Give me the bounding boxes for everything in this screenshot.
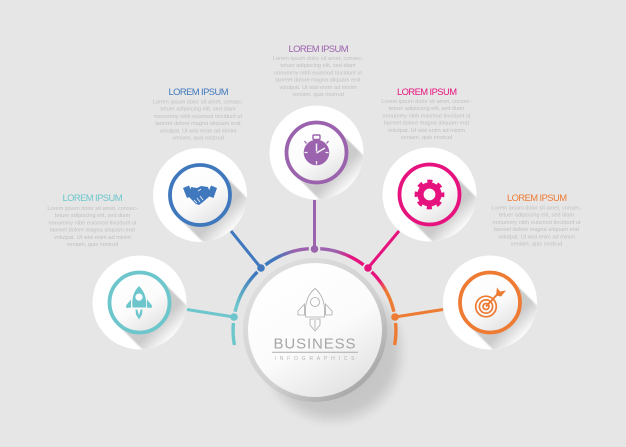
- text block: purple: Lorem ipsum dolor sit amet, consec-: [273, 56, 363, 62]
- text block: blue: laoreet dolore magna aliquam erat: [155, 121, 241, 127]
- hub title: [272, 336, 358, 362]
- text block: orange: [491, 192, 582, 248]
- text block: teal: Lorem ipsum dolor sit amet, consec-: [47, 206, 138, 212]
- text block: pink: tetuer adipiscing elit, sed diam: [389, 106, 464, 112]
- center hub: [243, 258, 387, 402]
- text block: purple: volutpat. Ut wisi enim ad minim: [279, 85, 357, 91]
- panel: blue circle: [153, 148, 247, 242]
- text block: purple: veniam, quis nostrud: [292, 92, 344, 98]
- icon: handshake: [183, 186, 217, 205]
- text block: pink: Lorem ipsum dolor sit amet, consec-: [381, 99, 472, 105]
- text block: pink: volutpat. Ut wisi enim ad minim: [388, 128, 465, 134]
- hub logo: rocket outline: [298, 288, 332, 331]
- panel: purple circle: [270, 106, 364, 200]
- spoke: teal: [187, 310, 238, 321]
- icon: target with arrow: [476, 288, 506, 317]
- text block: blue: Lorem ipsum dolor sit amet, consec-: [153, 100, 243, 106]
- icon: rocket: [126, 286, 152, 320]
- text block: blue: [153, 86, 243, 142]
- text block: pink: LOREM IPSUM: [397, 86, 457, 97]
- icon: stopwatch: [304, 135, 329, 165]
- spoke: orange: [391, 310, 443, 321]
- panel: pink circle: [382, 148, 476, 242]
- spoke: pink: [364, 231, 399, 272]
- spoke: blue: [231, 231, 265, 272]
- panel: teal circle: [92, 256, 186, 350]
- text block: teal: laoreet dolore magna aliquam erat: [50, 228, 136, 234]
- text block: orange: Lorem ipsum dolor sit amet, consec-: [491, 206, 582, 212]
- text block: purple: [273, 43, 363, 98]
- text block: purple: LOREM IPSUM: [288, 43, 349, 54]
- text block: blue: tetuer adipiscing elit, sed diam: [160, 107, 236, 113]
- text block: orange: volutpat. Ut wisi enim ad minim: [498, 234, 575, 240]
- arc connector: [233, 249, 396, 345]
- text block: blue: LOREM IPSUM: [168, 86, 229, 97]
- text block: orange: nonummy nibh euismod tincidunt ut: [492, 220, 581, 226]
- text block: teal: nonummy nibh euismod tincidunt ut: [48, 220, 137, 226]
- hub title: INFOGRAPHICS: [274, 356, 355, 362]
- text block: blue: veniam, quis nostrud: [172, 136, 224, 142]
- spoke: purple: [311, 200, 318, 253]
- text block: orange: laoreet dolore magna aliquam erat: [494, 227, 580, 233]
- icon: gear: [417, 182, 442, 207]
- text block: purple: tetuer adipiscing elit, sed diam: [280, 63, 356, 69]
- text block: pink: [381, 86, 472, 141]
- text block: purple: nonummy nibh euismod tincidunt ut: [274, 70, 362, 76]
- text block: pink: nonummy nibh euismod tincidunt ut: [382, 113, 471, 119]
- text block: teal: [47, 192, 138, 248]
- text block: blue: nonummy nibh euismod tincidunt ut: [154, 114, 242, 120]
- text block: orange: LOREM IPSUM: [507, 192, 567, 203]
- text block: blue: volutpat. Ut wisi enim ad minim: [159, 128, 237, 134]
- panel: orange circle: [443, 256, 537, 350]
- center long shadow: [258, 277, 408, 427]
- text block: orange: veniam, quis nostrud: [511, 242, 562, 248]
- text block: teal: veniam, quis nostrud: [67, 242, 118, 248]
- text block: pink: veniam, quis nostrud: [401, 135, 452, 141]
- text block: teal: volutpat. Ut wisi enim ad minim: [54, 235, 131, 241]
- text block: pink: laoreet dolore magna aliquam erat: [384, 121, 470, 127]
- text block: teal: tetuer adipiscing elit, sed diam: [55, 213, 130, 219]
- hub title: BUSINESS: [274, 336, 356, 352]
- text block: purple: laoreet dolore magna aliquam erat: [275, 78, 361, 84]
- text block: teal: LOREM IPSUM: [62, 192, 123, 203]
- text block: orange: tetuer adipiscing elit, sed diam: [499, 213, 574, 219]
